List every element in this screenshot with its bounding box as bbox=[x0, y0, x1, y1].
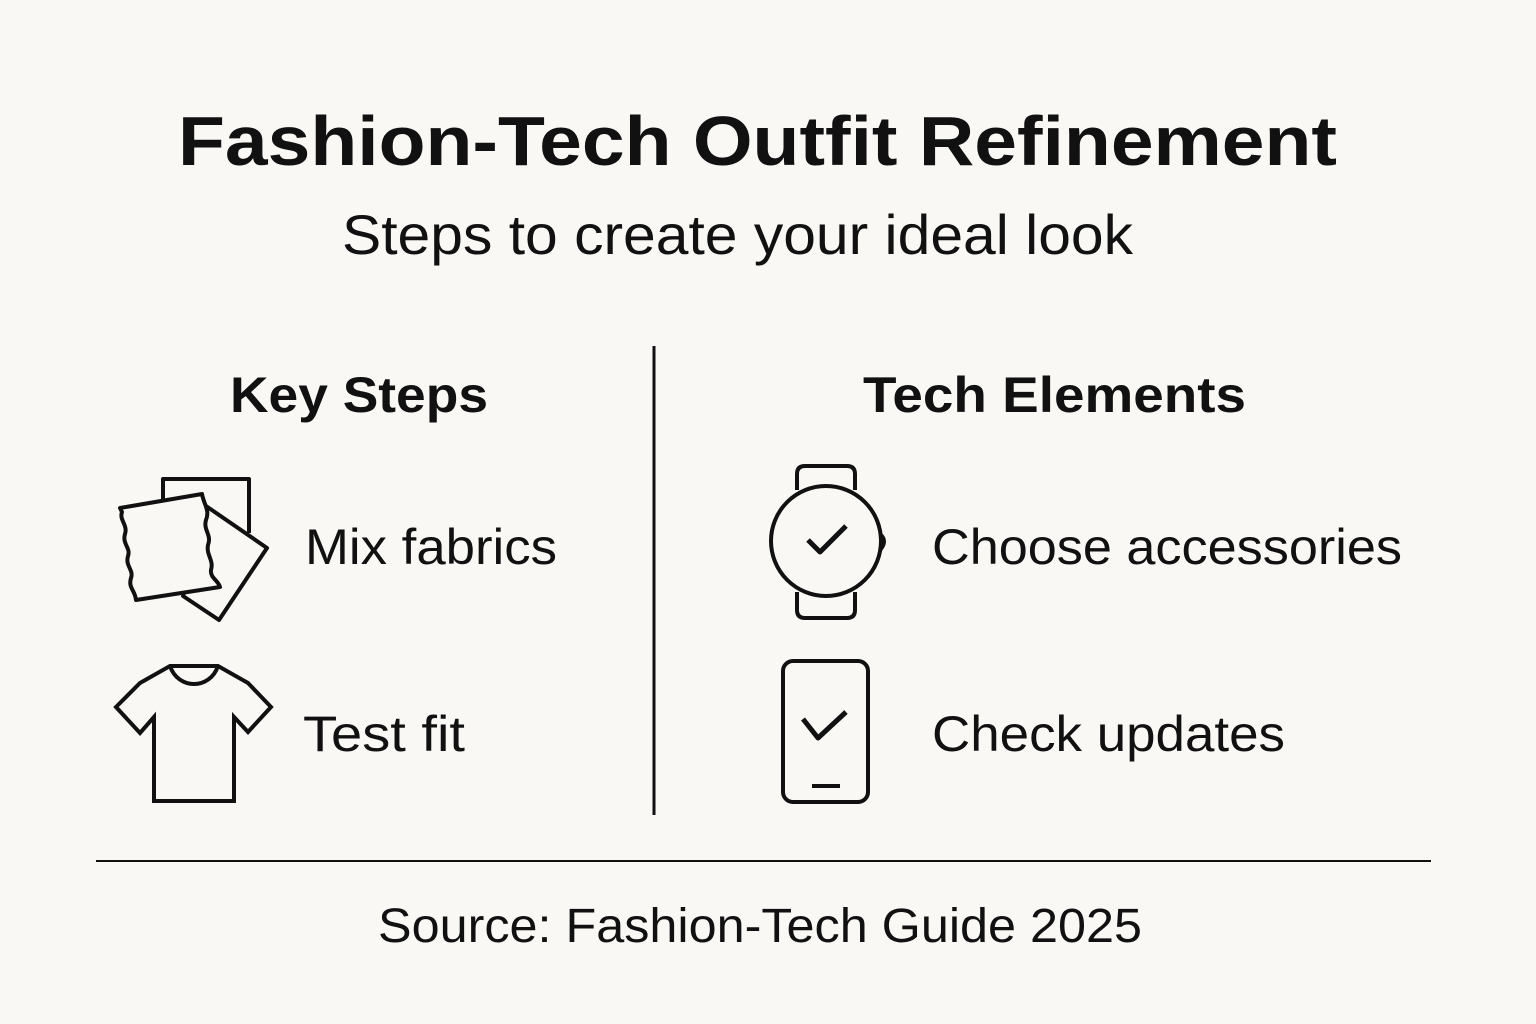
heading: Tech Elements: Tech Elements bbox=[863, 367, 1246, 423]
label: Mix fabrics: Mix fabrics bbox=[305, 519, 557, 575]
icon: fabrics bbox=[120, 479, 267, 620]
icon: t-shirt bbox=[116, 666, 271, 801]
icon: smartwatch bbox=[771, 466, 884, 618]
source: Source: Fashion-Tech Guide 2025 bbox=[378, 900, 1142, 953]
label: Test fit: Test fit bbox=[303, 706, 465, 762]
label: Check updates: Check updates bbox=[932, 706, 1285, 762]
subtitle: Steps to create your ideal look bbox=[342, 203, 1134, 266]
label: Choose accessories: Choose accessories bbox=[932, 519, 1402, 575]
title: Fashion-Tech Outfit Refinement bbox=[178, 102, 1337, 180]
heading: Key Steps: Key Steps bbox=[230, 367, 488, 423]
icon: phone bbox=[783, 661, 868, 802]
